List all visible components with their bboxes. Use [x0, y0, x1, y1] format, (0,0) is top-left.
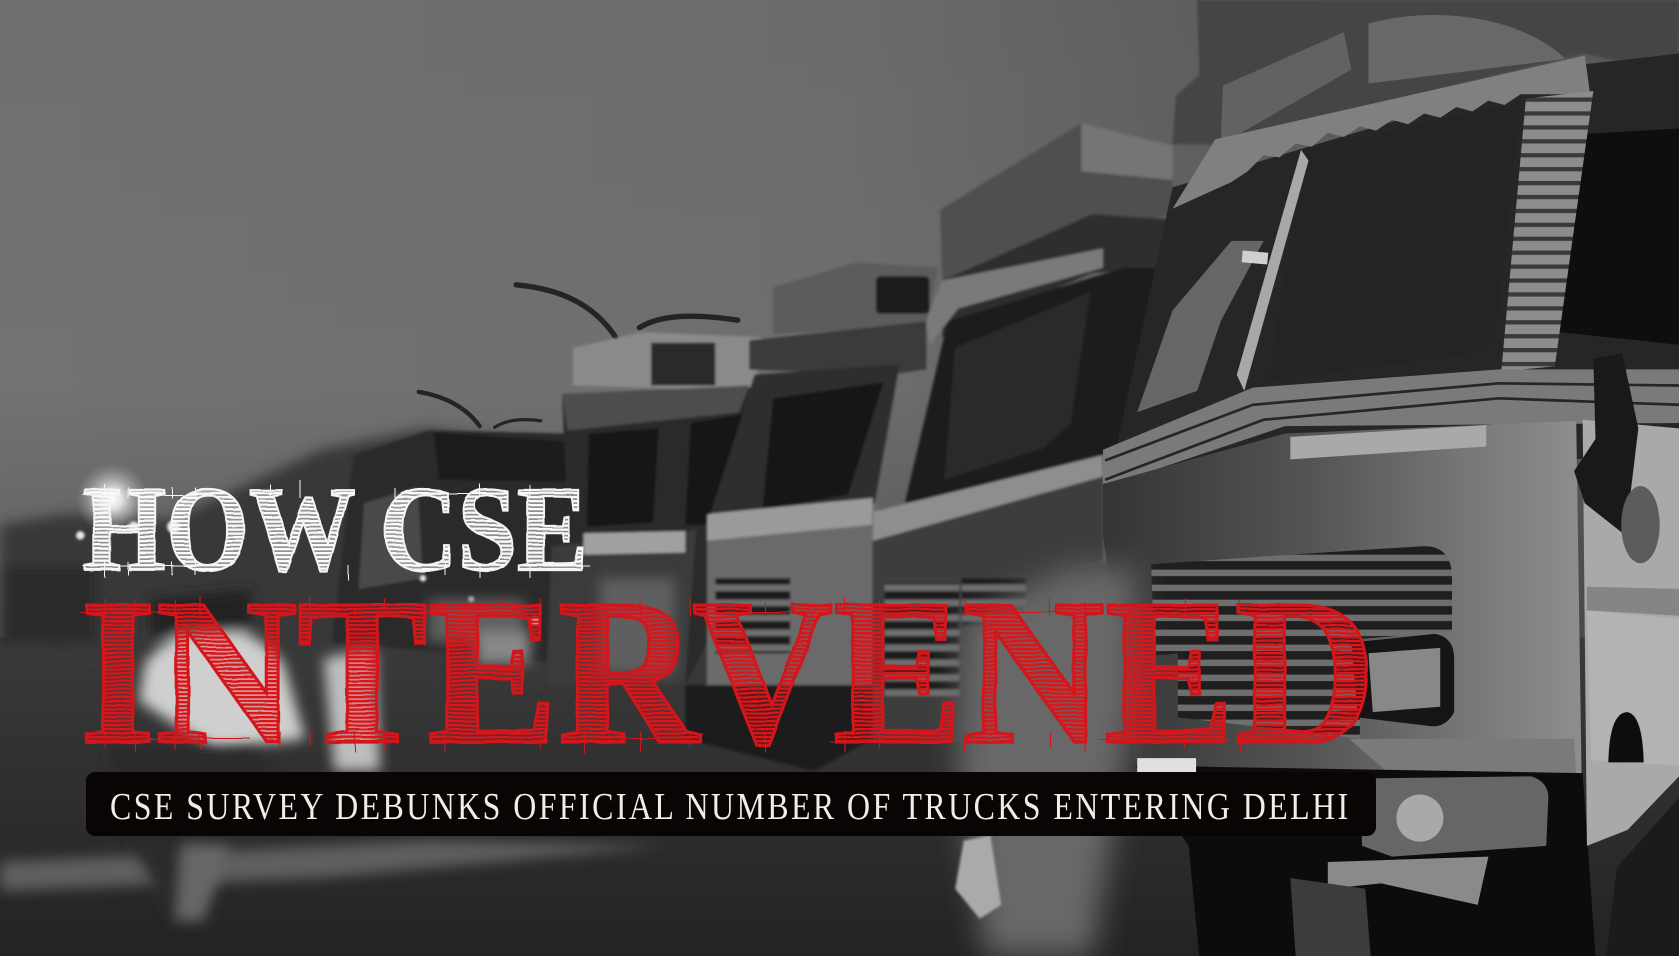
bright patch above subtitle: [1137, 758, 1196, 773]
road highlight strip: [0, 841, 664, 891]
distant tree line and buildings: [0, 428, 578, 685]
windshield pillar: [1237, 150, 1309, 391]
left side window: [1137, 241, 1264, 412]
cab front panel: [1103, 421, 1583, 846]
tow hook and bracket: [1328, 857, 1488, 905]
mud flap: [1290, 878, 1371, 956]
side door panel: [1583, 420, 1679, 846]
street lamps: [419, 285, 738, 427]
windshield: [1269, 102, 1521, 380]
tyre: [1606, 798, 1679, 956]
banner background: [86, 772, 1376, 836]
second pedestrian: [323, 648, 380, 771]
band stripes: [1105, 383, 1679, 480]
name plate front: [1290, 425, 1486, 459]
subtitle text: CSE SURVEY DEBUNKS OFFICIAL NUMBER OF TRUCKS ENTERING DELHI: [110, 785, 1348, 828]
radiator grill: [1151, 546, 1452, 655]
ribbed chrome strip: [1501, 91, 1593, 372]
headlight: [1351, 634, 1454, 726]
right side dark cavity: [1558, 128, 1679, 345]
sky vertical shading: [0, 0, 1679, 642]
motorbike blur: [107, 744, 278, 921]
small bokeh lights: [76, 520, 540, 625]
mid road busy highlights: [428, 578, 675, 675]
truck four: [546, 332, 762, 685]
truck two: [873, 123, 1173, 750]
sign panel left: [1221, 32, 1351, 145]
scalloped visor: [1173, 56, 1590, 209]
white sketch overshoot lines: [83, 480, 590, 580]
cab body dark: [1103, 54, 1679, 503]
door trim: [1587, 587, 1679, 616]
lead truck cab: [1103, 0, 1679, 956]
blurred pedestrian in foreground: [958, 568, 1135, 956]
far trucks: [332, 430, 573, 664]
red sketch overshoot lines: [80, 596, 1330, 754]
title line: HOW CSE: HOW CSE: [83, 462, 588, 597]
bumper: [1360, 776, 1548, 857]
subtitle banner: [86, 772, 1376, 836]
road: [0, 637, 1679, 956]
pedestrian hand: [955, 835, 1001, 919]
lower front panel highlight: [1349, 739, 1576, 776]
lower grill: [1178, 637, 1360, 739]
sky: [0, 0, 1679, 642]
hanging tassels: [1574, 353, 1638, 535]
front decorative band: [1103, 369, 1679, 487]
door handle oval: [1621, 486, 1660, 563]
cab upper sign board: [1173, 0, 1679, 145]
sign panel right: [1368, 15, 1566, 84]
top light: [1242, 251, 1268, 265]
door chequer plate: [1587, 610, 1679, 766]
blurred pedestrian in white shirt: [139, 589, 305, 750]
truck three: [685, 262, 938, 771]
bumper emblem: [1396, 795, 1443, 842]
bumper shadow area: [1135, 766, 1595, 956]
street light flare: [76, 463, 149, 535]
title line: INTERVENED: INTERVENED: [80, 557, 1376, 788]
door arch opening: [1608, 712, 1644, 762]
